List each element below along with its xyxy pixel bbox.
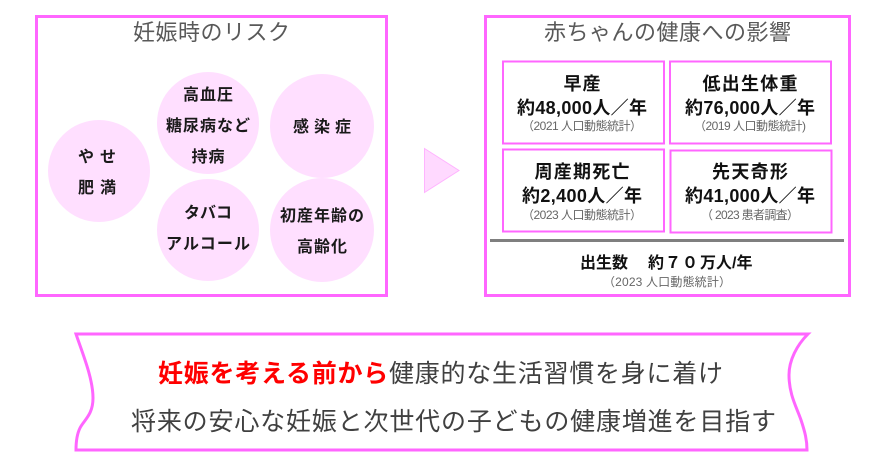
- panel: pregnancy risks: [36, 16, 386, 296]
- stat box: preterm birth: 早産: [564, 74, 600, 94]
- stat box: preterm birth: 約48,000人／年: [517, 97, 647, 118]
- stat box: congenital anomalies: （ 2023 患者調査）: [701, 208, 799, 222]
- risk circle: infection: 感染症: [293, 117, 351, 136]
- births total: ７: [665, 255, 681, 272]
- births total: ０: [682, 255, 698, 272]
- stat box: perinatal death: 周産期死亡: [534, 162, 630, 182]
- stat box: low birth weight: [670, 62, 831, 144]
- risk circle: older first-birth age: [270, 178, 374, 282]
- risk circle: chronic illness: 高血圧: [183, 85, 233, 104]
- risk circle: smoking and alcohol: アルコール: [166, 236, 250, 253]
- births total: 万人/年: [700, 253, 752, 272]
- stat box: congenital anomalies: 約41,000人／年: [685, 185, 815, 206]
- stat box: perinatal death: 約2,400人／年: [522, 185, 642, 206]
- risk circle: underweight and obesity: 肥満: [78, 179, 116, 197]
- stat box: congenital anomalies: 先天奇形: [712, 162, 788, 182]
- births total: 約: [648, 254, 664, 272]
- banner line 1: 妊娠を考える前から健康的な生活習慣を身に着け: [158, 360, 723, 388]
- risk circle: underweight and obesity: やせ: [78, 148, 116, 166]
- stat box: perinatal death: [503, 150, 664, 232]
- stat box: low birth weight: 低出生体重: [702, 74, 798, 94]
- risk circle: chronic illness: 持病: [192, 148, 224, 166]
- risk circle: older first-birth age: 高齢化: [297, 237, 347, 256]
- banner line 2: 将来の安心な妊娠と次世代の子どもの健康増進を目指す: [131, 408, 776, 436]
- panel: effects on baby health: [486, 16, 850, 296]
- risk circle: infection: [270, 74, 374, 178]
- banner: [76, 334, 808, 450]
- births total: [580, 253, 752, 289]
- risk circle: chronic illness: 糖尿病など: [166, 116, 250, 135]
- stat box: preterm birth: （2021 人口動態統計）: [522, 118, 642, 133]
- heading: pregnancy risks: 妊娠時のリスク: [133, 20, 290, 45]
- heading: effects on baby health: 赤ちゃんの健康への影響: [544, 20, 791, 45]
- divider: [490, 239, 844, 242]
- births total: 出生数: [580, 254, 628, 272]
- stat box: perinatal death: （2023 人口動態統計）: [522, 207, 642, 222]
- risk circle: smoking and alcohol: タバコ: [184, 204, 232, 222]
- stat box: low birth weight: 約76,000人／年: [685, 97, 815, 118]
- births total: （2023 人口動態統計）: [603, 274, 731, 289]
- arrow: [424, 148, 459, 192]
- risk circle: underweight and obesity: [48, 120, 150, 222]
- stat box: low birth weight: （2019 人口動態統計): [694, 118, 806, 133]
- risk circle: older first-birth age: 初産年齢の: [280, 206, 364, 225]
- stat box: preterm birth: [503, 62, 664, 144]
- risk circle: chronic illness: [157, 72, 259, 174]
- risk circle: smoking and alcohol: [157, 179, 259, 281]
- stat box: congenital anomalies: [670, 150, 832, 232]
